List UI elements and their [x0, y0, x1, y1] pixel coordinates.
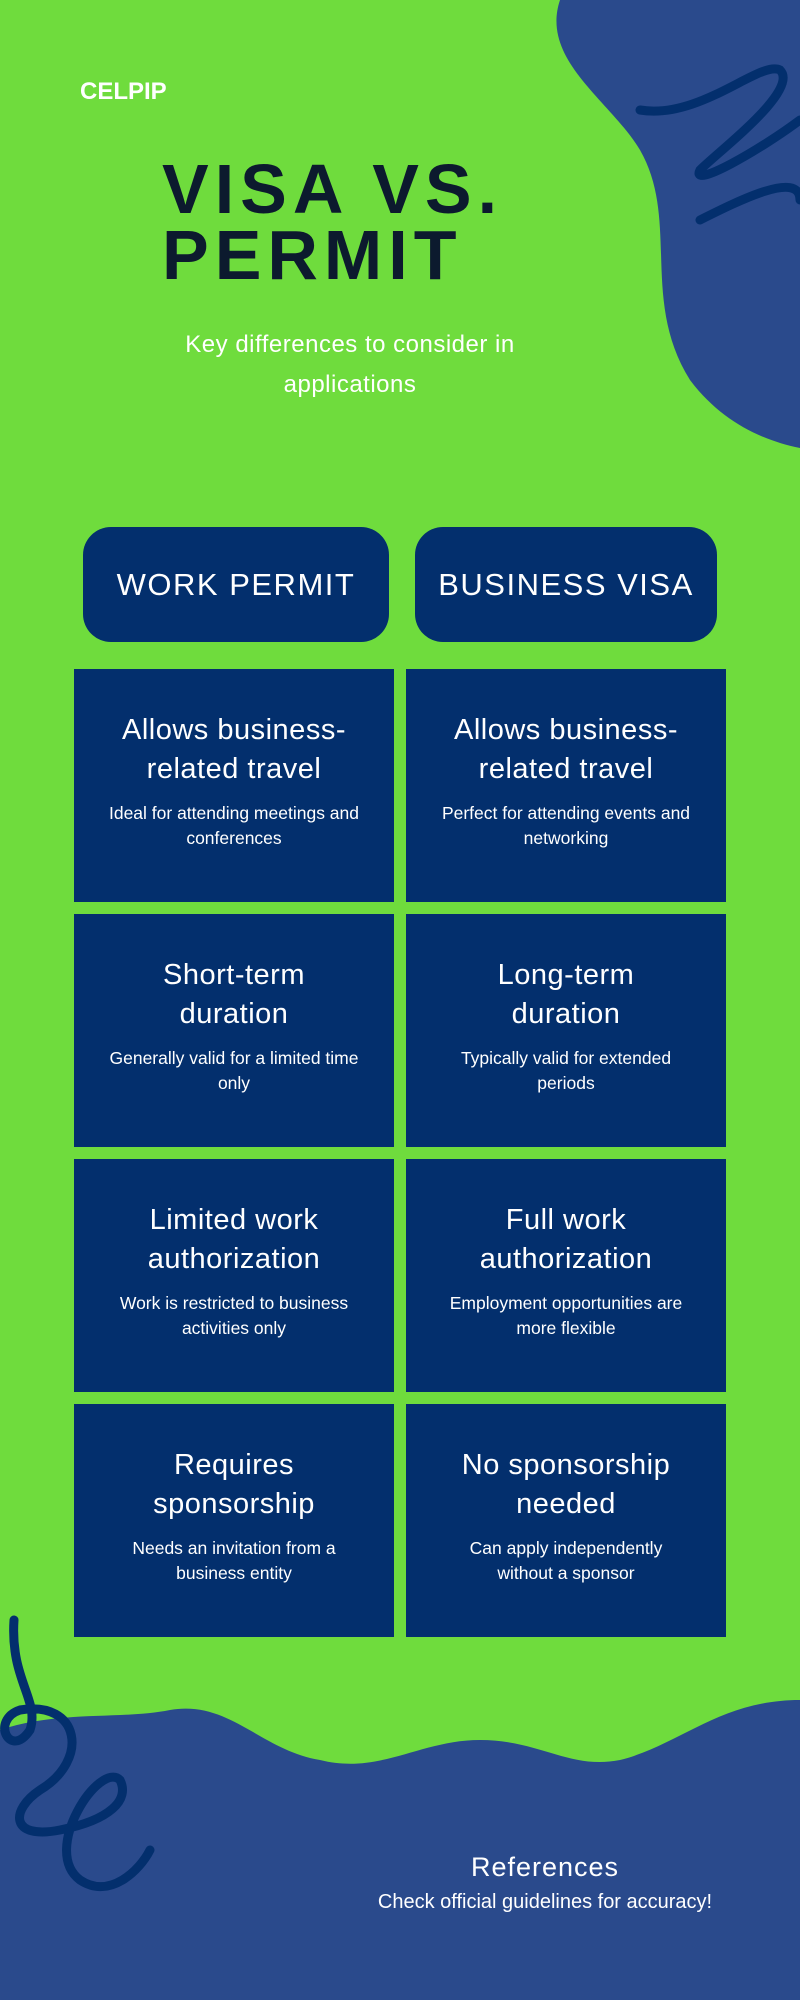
header: business visa: BUSINESS VISA — [438, 566, 694, 602]
cell: long-term — [406, 914, 726, 1147]
cell: work travel: Ideal for attending meetings and conferences — [109, 803, 359, 848]
cell: work travel: Allows business- — [122, 714, 346, 746]
cell: sponsorship: Needs an invitation from a business entity — [132, 1538, 336, 1583]
cell: full work: Full work — [506, 1204, 626, 1236]
references — [378, 1852, 712, 1913]
brand: CELPIP: CELPIP — [80, 78, 167, 105]
subtitle: Key differences to consider in — [185, 331, 515, 358]
cell: sponsorship — [74, 1404, 394, 1637]
cell: no sponsorship: needed — [516, 1488, 616, 1520]
cell: full work — [406, 1159, 726, 1392]
cell: limited work: authorization — [148, 1243, 320, 1275]
references: Check official guidelines for accuracy! — [378, 1891, 712, 1913]
cell: full work: authorization — [480, 1243, 652, 1275]
cell: sponsorship: Requires — [174, 1449, 294, 1481]
cell: work travel: related travel — [147, 753, 321, 785]
cell: visa travel: related travel — [479, 753, 653, 785]
cell: short-term: Generally valid for a limited time only — [110, 1048, 358, 1093]
cell: visa travel — [406, 669, 726, 902]
cell: limited work: Limited work — [150, 1204, 318, 1236]
references: References — [471, 1852, 619, 1882]
cell: long-term: Long-term — [498, 959, 634, 991]
cell: short-term: duration — [180, 998, 288, 1030]
blob: top right — [556, 0, 800, 448]
cell: no sponsorship: No sponsorship — [462, 1449, 670, 1481]
cell: work travel — [74, 669, 394, 902]
cell: short-term — [74, 914, 394, 1147]
cell: limited work — [74, 1159, 394, 1392]
cell: no sponsorship — [406, 1404, 726, 1637]
cell: visa travel: Allows business- — [454, 714, 678, 746]
cell: short-term: Short-term — [163, 959, 305, 991]
cell: limited work: Work is restricted to business activities only — [120, 1293, 348, 1338]
cell: long-term: Typically valid for extended periods — [461, 1048, 671, 1093]
blob: bottom — [0, 1620, 800, 2000]
title: VISA VS. — [162, 150, 503, 228]
cell: visa travel: Perfect for attending events and networking — [442, 803, 690, 848]
header: business visa — [415, 527, 717, 642]
cell: sponsorship: sponsorship — [153, 1488, 315, 1520]
subtitle — [185, 331, 515, 398]
cell: full work: Employment opportunities are more flexible — [450, 1293, 682, 1338]
title: PERMIT — [162, 216, 462, 294]
title — [162, 150, 503, 294]
header: work permit: WORK PERMIT — [117, 566, 355, 602]
cell: no sponsorship: Can apply independently without a sponsor — [470, 1538, 662, 1583]
cell: long-term: duration — [512, 998, 620, 1030]
subtitle: applications — [284, 371, 416, 398]
header: work permit — [83, 527, 389, 642]
